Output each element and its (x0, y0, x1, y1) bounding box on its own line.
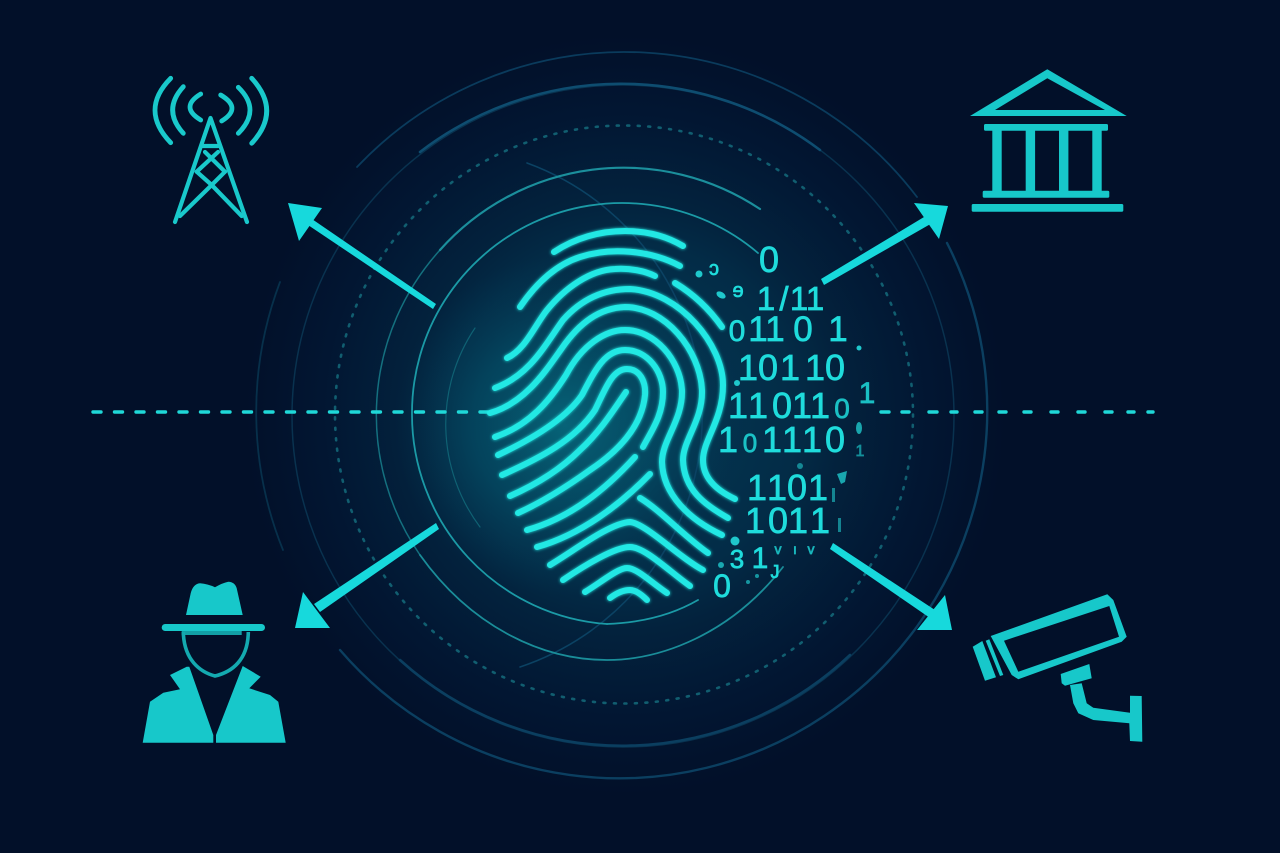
central glow (245, 35, 1005, 795)
fingerprint (490, 231, 735, 600)
binary digits dissolving from fingerprint: 0 (713, 568, 731, 604)
binary digits dissolving from fingerprint: 11011 (728, 385, 830, 426)
binary digits dissolving from fingerprint (709, 239, 875, 604)
arrow: to bank (821, 203, 948, 285)
binary digits dissolving from fingerprint: ɘ (732, 280, 744, 302)
binary digits dissolving from fingerprint: 1 (718, 419, 738, 460)
icon: signal tower (155, 78, 267, 222)
binary digits dissolving from fingerprint: 1101 (748, 310, 848, 349)
binary digits dissolving from fingerprint: 1 (752, 542, 768, 575)
arrow: to signal tower (288, 203, 436, 309)
binary digits dissolving from fingerprint: 3 (730, 544, 744, 574)
arrow: to spy (295, 523, 439, 628)
concentric rings (256, 52, 987, 778)
binary digits dissolving from fingerprint: 0 (743, 428, 757, 458)
binary digits dissolving from fingerprint: 10110 (738, 347, 845, 388)
dashed horizontal axis (93, 410, 1153, 414)
binary digits dissolving from fingerprint: 1 (859, 377, 875, 410)
binary digits dissolving from fingerprint: 1110 (762, 419, 845, 460)
binary digits dissolving from fingerprint: J (770, 562, 780, 582)
binary digits dissolving from fingerprint: 0 (729, 315, 745, 348)
icon: surveillance camera (973, 594, 1142, 742)
digit fragments (696, 270, 862, 584)
binary digits dissolving from fingerprint: 0 (759, 239, 779, 280)
binary digits dissolving from fingerprint: vıv (774, 541, 814, 557)
binary digits dissolving from fingerprint: 1/11 (757, 280, 824, 317)
binary digits dissolving from fingerprint: 0 (834, 393, 850, 424)
arrow: to camera (830, 543, 952, 630)
binary digits dissolving from fingerprint: ɔ (709, 258, 719, 280)
binary digits dissolving from fingerprint: 1 (856, 443, 865, 460)
icon: bank (970, 69, 1127, 212)
binary digits dissolving from fingerprint: 1011 (745, 500, 830, 541)
icon: spy in hat and coat (143, 582, 286, 743)
binary digits dissolving from fingerprint: 1101 (747, 467, 828, 508)
